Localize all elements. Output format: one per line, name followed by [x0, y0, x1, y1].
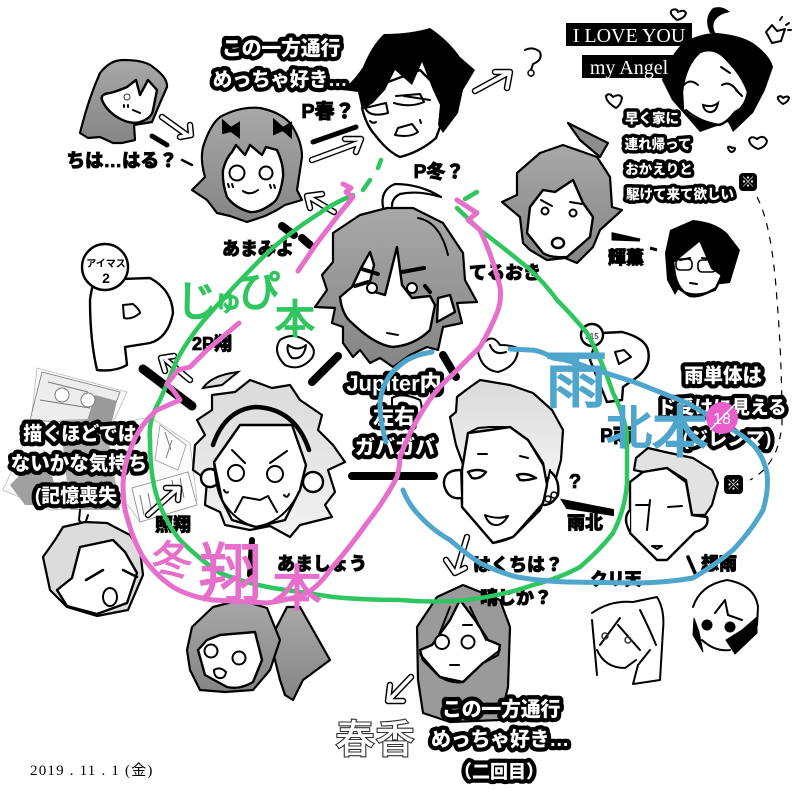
handwritten title: じゅぴ本 — [176, 268, 315, 342]
head: Hokuto center — [444, 380, 563, 543]
label: クリ天: クリ天 — [590, 570, 642, 589]
label: てるおき: てるおき — [469, 263, 541, 283]
head: young Shota — [43, 510, 143, 616]
center caption: Jupiter: ガバガバ — [355, 435, 435, 459]
green loop: Jupiter book — [150, 160, 627, 602]
big P with bubble: アイマス — [86, 258, 126, 270]
note mark top: ※ — [741, 174, 755, 190]
note mark right: ※ — [726, 477, 740, 493]
manga page collage — [3, 368, 197, 522]
big P with bubble — [82, 244, 173, 370]
big P with bubble: 2 — [102, 270, 110, 286]
label: あまみよ: あまみよ — [222, 239, 294, 259]
note mark right — [724, 475, 743, 494]
decoration: hearts and sparkle — [525, 9, 791, 152]
handwritten title: 雨北本: 雨 — [545, 347, 607, 416]
dashed connector — [750, 197, 782, 480]
label: 2P翔: 2P翔 — [192, 334, 232, 354]
label: ちは: ちは…はる？ — [66, 150, 178, 171]
heading: 春香: 春香 — [335, 718, 415, 762]
label: しょう: あましょう — [277, 554, 367, 574]
handwritten title: じゅぴ本: じ — [176, 278, 218, 325]
caption: 早く家に: 連れ帰って — [625, 136, 691, 152]
small P with 315 bubble — [581, 324, 649, 402]
caption: 早く家に — [625, 110, 734, 202]
label: 晴じか: 晴じか？ — [480, 587, 552, 608]
head: Ame — [626, 448, 718, 560]
handwritten title: 冬翔本: 冬 — [152, 539, 192, 583]
date: 2019 . 11 . 1 (金) — [30, 762, 154, 779]
handwritten title: じゅぴ本: 本 — [275, 298, 315, 342]
heading: one-way love bottom — [431, 697, 569, 782]
caption: 描くほどでは — [11, 422, 147, 507]
head: bob woman — [693, 580, 758, 654]
label: question: ? — [569, 471, 581, 493]
label: P雨: P雨 — [600, 426, 632, 447]
heading: one-way love top: この一方通行 — [222, 36, 340, 60]
label: 輝薫: 輝薫 — [608, 247, 644, 268]
handwritten title: じゅぴ本: ぴ — [238, 268, 280, 315]
center caption: Jupiter: 左右 — [373, 406, 415, 429]
heading: one-way love bottom: この一方通行 — [442, 697, 560, 721]
caption: 描くほどでは: 描くほどでは — [23, 422, 137, 445]
badge: 18 prohibited — [706, 402, 738, 434]
small P with 315 bubble: 315 — [585, 332, 599, 341]
head: Shota center — [193, 372, 345, 537]
label: P冬: P冬？ — [414, 160, 464, 183]
caption: 雨単体は — [658, 364, 786, 450]
badge: 18 prohibited: 18 — [713, 411, 731, 428]
pink loop: Touma Shota book — [123, 184, 501, 603]
head: Haruka with bows — [192, 108, 302, 222]
handwritten title: 雨北本: 本 — [652, 401, 708, 464]
handwritten title: 冬翔本: 翔 — [198, 538, 262, 610]
heading: one-way love top: めっちゃ好き… — [213, 69, 347, 91]
heading: one-way love bottom: めっちゃ好き… — [431, 728, 569, 751]
center caption: Jupiter: Jupiter内 — [346, 371, 442, 396]
caption: 雨単体は: ド受けに見える — [658, 397, 786, 418]
heading: one-way love bottom: （二回目） — [454, 762, 544, 782]
love text — [566, 23, 692, 79]
caption: 早く家に: 早く家に — [625, 110, 679, 126]
head: bottom girl — [417, 585, 510, 722]
handwritten title: じゅぴ本: ゅ — [214, 285, 242, 316]
head: top man with glasses — [343, 28, 475, 157]
love text: I LOVE YOU — [573, 25, 686, 47]
caption: 雨単体は: 雨単体は — [684, 364, 762, 387]
arrows between characters — [148, 72, 510, 701]
head: ponytail woman — [592, 597, 663, 684]
handwritten title: 雨北本: 北 — [606, 402, 652, 454]
love text: my Angel — [590, 57, 669, 79]
label: 雨北: 雨北 — [567, 513, 603, 533]
heading: one-way love top — [213, 36, 347, 91]
head: Kaoru — [665, 220, 740, 296]
center caption: Jupiter — [346, 371, 442, 459]
logo: Jupiter marks — [277, 336, 518, 422]
caption: 雨単体は: (ジレンマ) — [683, 429, 771, 450]
caption: 早く家に: 駆けて来て欲しい — [626, 186, 734, 202]
head: Kirio — [502, 123, 622, 263]
head: Touma center — [315, 184, 477, 367]
label: P春: P春？ — [301, 100, 355, 123]
head: girl top left — [80, 60, 167, 143]
head: top right man — [662, 7, 773, 132]
label: 想雨: 想雨 — [701, 554, 737, 574]
blue loop: Ame Hokuto book — [380, 349, 768, 583]
label: はくちは: はくちは？ — [473, 555, 563, 575]
handwritten title: 冬翔本: 本 — [272, 561, 322, 617]
handwritten title: 冬翔本 — [152, 538, 322, 617]
caption: 早く家に: おかえりと — [625, 162, 693, 177]
label: 照翔: 照翔 — [155, 515, 191, 535]
note mark top — [739, 173, 757, 191]
relation bars — [143, 127, 695, 575]
caption: 描くほどでは: ないかな気持ち — [11, 452, 147, 475]
handwritten title: 雨北本 — [545, 347, 708, 464]
caption: 描くほどでは: (記憶喪失 — [35, 484, 117, 507]
head: maid girl — [187, 600, 330, 700]
